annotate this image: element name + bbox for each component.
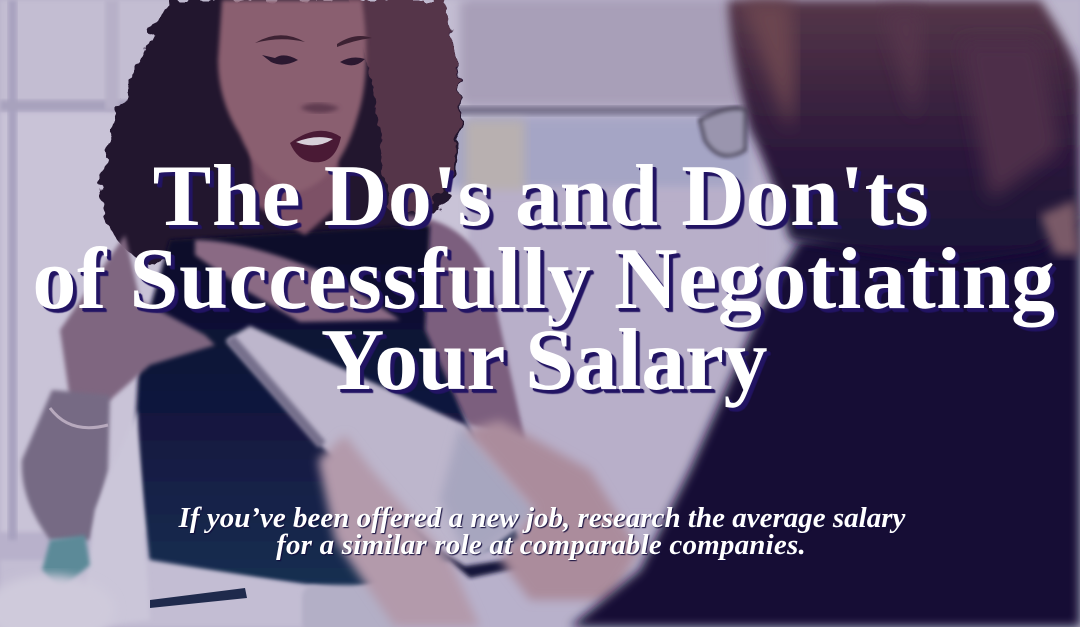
eyebrows <box>255 35 372 47</box>
hand on hip <box>1040 200 1080 255</box>
title <box>32 148 1058 412</box>
woman speaking <box>22 0 525 590</box>
tablet <box>226 326 565 578</box>
hair <box>728 0 1080 265</box>
table <box>0 560 360 627</box>
forearm <box>22 390 110 540</box>
glass <box>302 585 397 627</box>
subtitle line 1: If you’ve been offered a new job, research the average salary <box>179 502 905 534</box>
raised hand <box>60 235 215 400</box>
glasses <box>700 109 745 156</box>
eyes <box>262 55 365 65</box>
title line 3: Your Salary <box>321 312 767 409</box>
pen <box>150 588 247 608</box>
hands and forearm <box>318 435 480 627</box>
body <box>570 215 1080 627</box>
hair <box>100 0 461 265</box>
bracelet <box>50 408 108 428</box>
title line 1: The Do's and Don'ts <box>153 148 929 245</box>
woman listening <box>318 0 1080 627</box>
lips <box>290 131 341 162</box>
title line 2: of Successfully Negotiating <box>32 231 1056 328</box>
subtitle line 2: for a similar role at comparable companies. <box>276 529 806 561</box>
shoulder and arm <box>400 215 525 440</box>
upper hand <box>195 240 400 322</box>
subtitle <box>178 502 906 562</box>
table items <box>0 410 397 627</box>
plant <box>42 535 90 590</box>
dress <box>135 225 520 590</box>
nose shadow <box>300 103 340 113</box>
face <box>218 0 366 192</box>
neck and chest <box>250 150 345 235</box>
vase <box>0 575 115 627</box>
paper cone <box>80 410 150 627</box>
